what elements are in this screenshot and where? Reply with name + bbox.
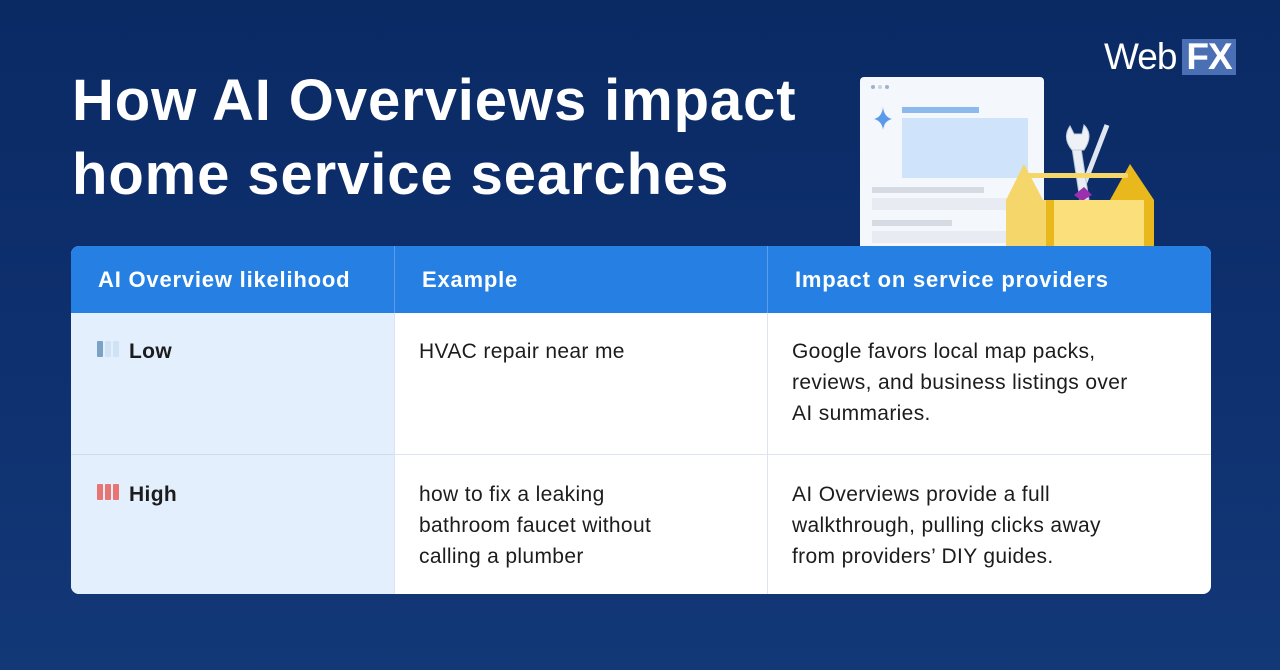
logo xyxy=(1104,36,1236,77)
row high: example: bathroom faucet without xyxy=(419,514,651,537)
row high: impact: walkthrough, pulling clicks away xyxy=(792,514,1101,537)
row high: example: how to fix a leaking xyxy=(419,483,605,506)
title: home service searches xyxy=(72,142,729,207)
row high: impact xyxy=(767,454,1211,594)
header: example: Example xyxy=(422,267,518,292)
illustration: browser and toolbox xyxy=(860,77,1154,246)
row low: likelihood xyxy=(71,313,394,454)
row low: impact: AI summaries. xyxy=(792,402,931,425)
logo: FX xyxy=(1186,36,1232,77)
logo: Web xyxy=(1104,36,1176,77)
row high: example xyxy=(394,454,767,594)
row high: example: calling a plumber xyxy=(419,545,584,568)
header: example xyxy=(394,246,767,313)
row low: impact: Google favors local map packs, xyxy=(792,340,1095,363)
row high: impact: AI Overviews provide a full xyxy=(792,483,1050,506)
row low: example xyxy=(394,313,767,454)
title xyxy=(72,68,796,207)
row low: impact: reviews, and business listings over xyxy=(792,371,1128,394)
browser window xyxy=(860,77,1044,252)
row high: impact: from providers’ DIY guides. xyxy=(792,545,1054,568)
row high: likelihood: High xyxy=(129,483,177,506)
header: impact xyxy=(767,246,1211,313)
row low: impact xyxy=(767,313,1211,454)
header: impact: Impact on service providers xyxy=(795,267,1109,292)
header: likelihood: AI Overview likelihood xyxy=(98,267,350,292)
header: likelihood xyxy=(71,246,394,313)
row high: likelihood xyxy=(71,454,394,594)
row low: example: HVAC repair near me xyxy=(419,340,625,363)
row low: likelihood: Low xyxy=(129,340,172,363)
title: How AI Overviews impact xyxy=(72,68,796,133)
toolbox xyxy=(1006,125,1154,252)
table xyxy=(71,246,1211,594)
